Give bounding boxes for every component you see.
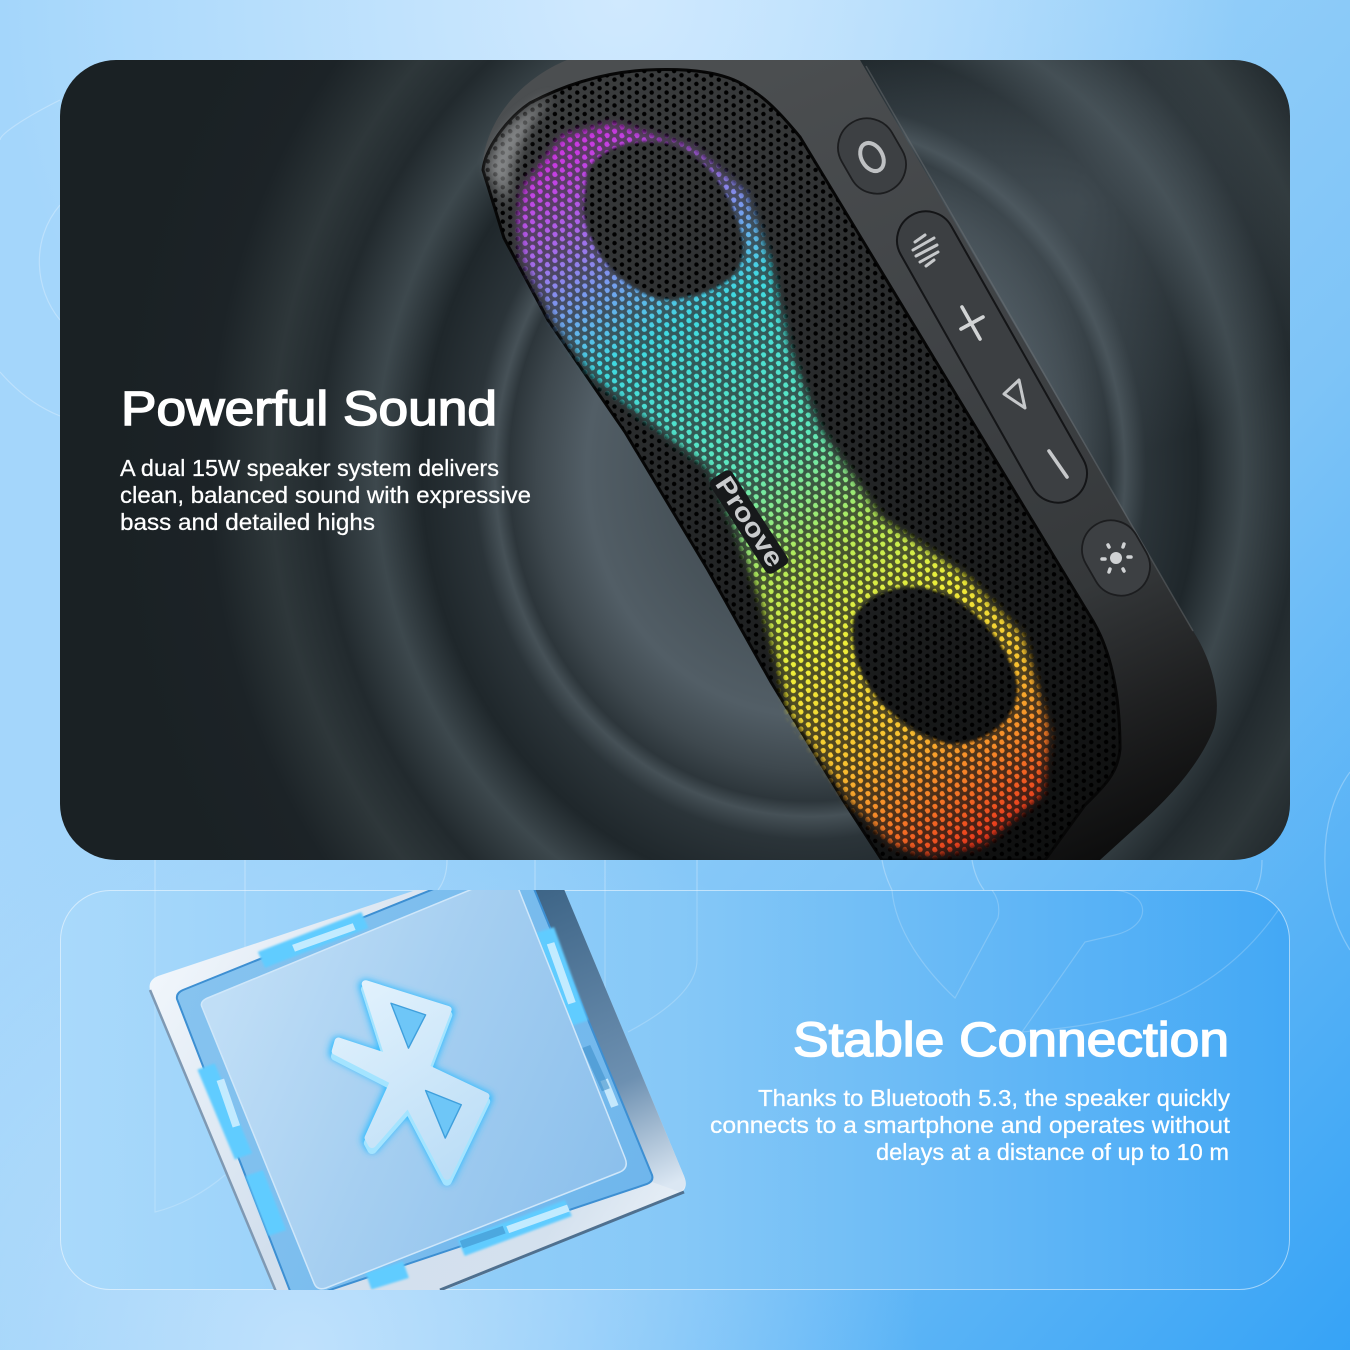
speaker: [480, 60, 1220, 860]
speaker logo: Proove: [709, 471, 790, 572]
icon: plus: [961, 307, 983, 339]
speaker buttons: [827, 108, 1161, 606]
icon: play: [1004, 380, 1025, 408]
text block: stable connection description: delays at a distance of up to 10 m: [876, 1139, 1229, 1165]
text block: powerful sound description: A dual 15W speaker system delivers: [120, 455, 499, 481]
tile lit channel: [177, 857, 652, 1300]
speaker body: [483, 60, 1217, 860]
heading: stable connection: Stable Connection: [793, 1014, 1229, 1067]
text block: stable connection description: [710, 1085, 1231, 1165]
tile lit segments: [206, 920, 615, 1281]
tile outer metal frame: [150, 890, 686, 1290]
icon: bluetooth symbol: [336, 984, 486, 1181]
panel: powerful sound: [60, 60, 1290, 860]
icon: light mode: [913, 235, 938, 266]
panel: stable connection: [60, 890, 1290, 1290]
tile frosted plate: [201, 875, 626, 1289]
text block: powerful sound description: clean, balanced sound with expressive: [120, 482, 531, 508]
text block: stable connection description: connects to a smartphone and operates without: [710, 1112, 1231, 1138]
speaker highlight at grille corner: [488, 96, 552, 205]
speaker rgb glow: [510, 118, 1056, 860]
icon: minus: [1049, 451, 1067, 477]
button: control strip: [896, 210, 1088, 504]
text block: powerful sound description: [120, 455, 531, 535]
text block: stable connection description: Thanks to Bluetooth 5.3, the speaker quickly: [758, 1085, 1231, 1111]
heading: powerful sound: Powerful Sound: [121, 383, 497, 436]
button: light: [1081, 520, 1151, 596]
icon: bluetooth glass tile: [148, 890, 686, 1290]
text block: powerful sound description: bass and detailed highs: [120, 509, 375, 535]
button: power: [837, 117, 907, 195]
speaker grille: [483, 70, 1120, 860]
